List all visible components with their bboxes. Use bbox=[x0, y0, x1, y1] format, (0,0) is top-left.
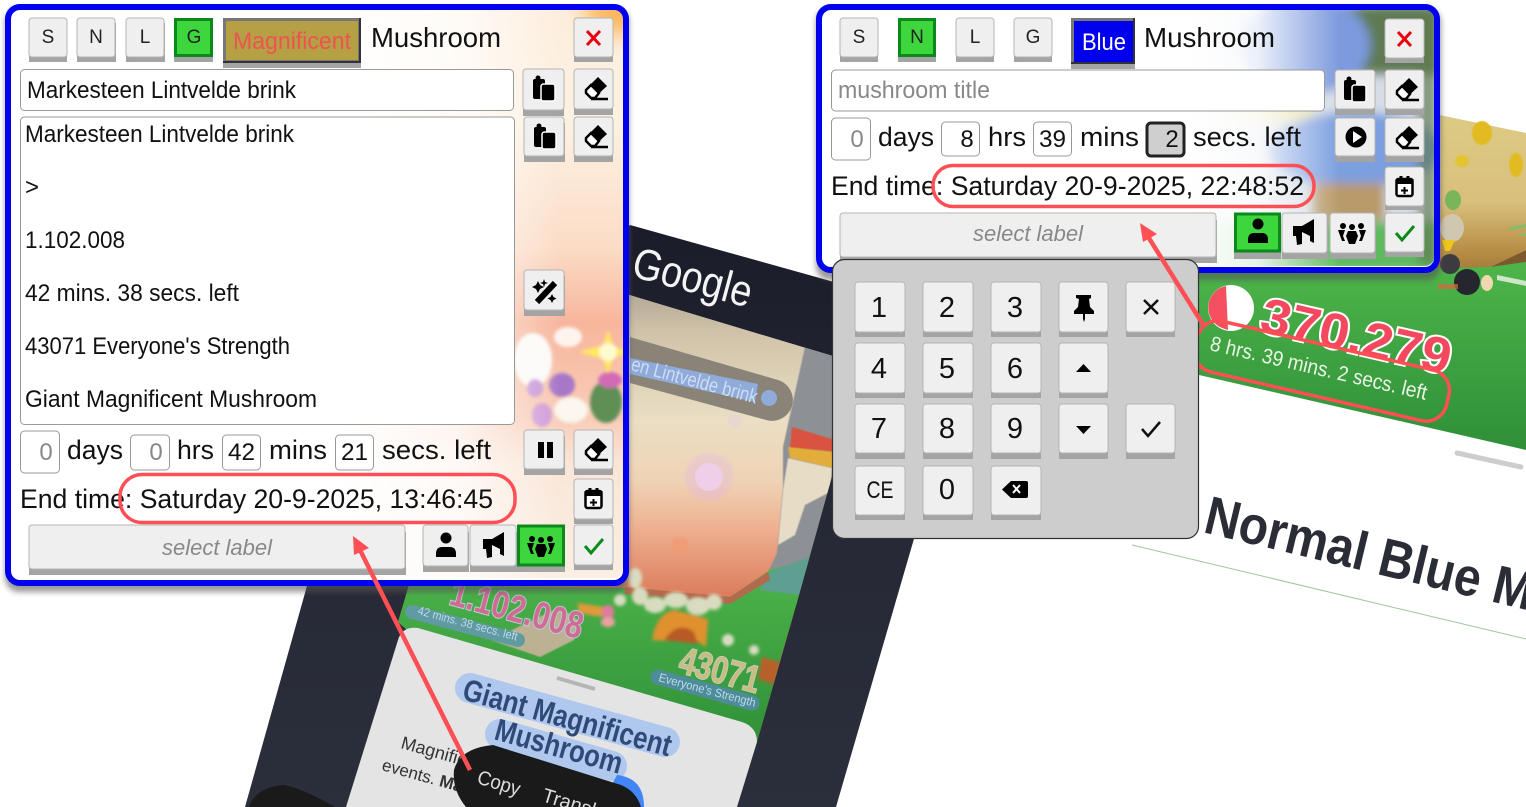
sheet handle bbox=[1457, 453, 1521, 467]
colour button: magnificent: Magnificent bbox=[233, 28, 351, 55]
notes text area: Giant Magnificent Mushroom bbox=[25, 386, 317, 413]
key close bbox=[1126, 282, 1175, 337]
size button L bbox=[956, 18, 994, 62]
play button bbox=[1335, 118, 1375, 162]
timer: seconds: secs. left bbox=[382, 435, 491, 465]
key 4: 4 bbox=[871, 353, 887, 385]
red highlight: remaining time bbox=[1190, 317, 1454, 425]
erase button bbox=[1385, 70, 1424, 115]
copy button bbox=[1335, 70, 1375, 115]
timer: seconds bbox=[336, 435, 491, 470]
group button bbox=[1330, 213, 1376, 259]
key 7: 7 bbox=[871, 413, 887, 445]
erase timer button bbox=[1385, 118, 1424, 162]
close button bbox=[1385, 19, 1424, 63]
key 4 bbox=[855, 343, 905, 398]
google logo: Google bbox=[627, 238, 758, 317]
timer: hours bbox=[942, 122, 1026, 156]
erase button bbox=[574, 69, 613, 115]
person button active bbox=[1234, 214, 1281, 259]
stat: remaining time: 8 hrs. 39 mins. 2 secs. left bbox=[1208, 332, 1429, 405]
confirm button bbox=[1385, 213, 1424, 257]
key confirm bbox=[1126, 404, 1175, 459]
size button G: G bbox=[1026, 27, 1040, 48]
select label button bbox=[29, 525, 406, 575]
key pin bbox=[1059, 282, 1108, 337]
sheet body text: events. Ma bbox=[380, 756, 466, 796]
red highlight: end time bbox=[933, 166, 1314, 206]
timer: seconds focused: secs. left bbox=[1193, 122, 1301, 152]
copy toolbar: Copy bbox=[475, 767, 523, 801]
stat: 370.279: 370.279 bbox=[1256, 287, 1457, 385]
title input bbox=[832, 70, 1324, 111]
timer: minutes: 39 bbox=[1039, 126, 1066, 153]
mushroom game scene bbox=[398, 294, 832, 742]
group button active bbox=[517, 526, 565, 572]
key 9: 9 bbox=[1007, 413, 1023, 445]
pause button bbox=[524, 430, 565, 475]
phone body bbox=[245, 225, 977, 807]
select label button: select label bbox=[162, 535, 273, 560]
key CE bbox=[855, 466, 905, 520]
timer: minutes: 42 bbox=[228, 439, 255, 466]
end time: End time: Saturday 20-9-2025, 22:48:52 bbox=[831, 171, 1304, 201]
timer: seconds focused: 2 bbox=[1165, 126, 1179, 153]
title input bbox=[20, 70, 514, 110]
end time: End time: Saturday 20-9-2025, 13:46:45 bbox=[20, 484, 493, 514]
arrow: right panel to remaining time bbox=[1140, 223, 1204, 326]
colour button: magnificent bbox=[223, 18, 361, 68]
notes text area: 42 mins. 38 secs. left bbox=[25, 280, 239, 307]
sheet body text bbox=[380, 733, 469, 796]
panel background image bbox=[399, 10, 623, 578]
panel background image bbox=[1214, 10, 1434, 266]
size button L bbox=[126, 18, 165, 62]
sheet title: Mushroom bbox=[491, 712, 627, 781]
key 9 bbox=[991, 404, 1041, 459]
timer: hours: hrs bbox=[177, 435, 214, 465]
close button bbox=[574, 18, 613, 62]
size button N bbox=[77, 18, 116, 62]
erase timer button bbox=[574, 430, 613, 475]
key 5 bbox=[923, 343, 973, 398]
timer: minutes bbox=[1034, 122, 1139, 156]
info sheet bbox=[346, 628, 757, 807]
timer: days: days bbox=[878, 122, 934, 152]
key 7 bbox=[855, 404, 905, 459]
system bar pill bbox=[249, 785, 335, 807]
timer: hours bbox=[130, 435, 214, 470]
countdown pie icon bbox=[1208, 285, 1254, 331]
size button N active bbox=[898, 20, 936, 62]
stat: score 1.102.008: 1.102.008 bbox=[446, 572, 588, 648]
notes text area: 1.102.008 bbox=[25, 227, 125, 254]
panel: numeric keypad bbox=[832, 260, 1198, 538]
size button G active: G bbox=[187, 27, 201, 48]
mushroom label: Mushroom bbox=[1144, 22, 1275, 53]
key 6 bbox=[991, 343, 1041, 398]
timer: seconds focused bbox=[1147, 122, 1301, 156]
arrow: left panel to copied text bbox=[353, 536, 470, 770]
stat: everyone's strength: Everyone's Strength bbox=[657, 670, 757, 710]
red highlight: end time bbox=[120, 474, 515, 522]
size button L: L bbox=[970, 27, 980, 48]
timer: days: days bbox=[67, 435, 123, 465]
key 2 bbox=[923, 282, 973, 337]
timer: minutes: mins bbox=[269, 435, 327, 465]
timer: minutes bbox=[222, 435, 327, 470]
size button S bbox=[840, 18, 878, 62]
green meadow band bbox=[1199, 254, 1526, 450]
erase notes button bbox=[574, 117, 613, 162]
stat: remaining time: 42 mins. 38 secs. left bbox=[416, 603, 520, 644]
key 1 bbox=[855, 282, 905, 337]
colour button: blue: Blue bbox=[1082, 29, 1126, 56]
size button S: S bbox=[853, 27, 865, 48]
mushroom label: Mushroom bbox=[371, 22, 501, 53]
confirm button bbox=[574, 525, 613, 570]
magic wand button bbox=[524, 270, 565, 316]
panel: magnificent mushroom editor bbox=[5, 0, 667, 592]
colour button: blue bbox=[1071, 18, 1135, 69]
copy notes button bbox=[524, 117, 565, 162]
timer: hours: 0 bbox=[149, 439, 163, 466]
orange flower huts bbox=[578, 568, 782, 685]
notes text area: 43071 Everyone's Strength bbox=[25, 333, 290, 360]
key 0: 0 bbox=[939, 474, 955, 506]
timer: days: 0 bbox=[39, 439, 53, 466]
notes text area: Markesteen Lintvelde brink bbox=[25, 121, 295, 148]
timer: minutes: mins bbox=[1080, 122, 1139, 152]
timer: hours: 8 bbox=[960, 126, 974, 153]
megaphone button bbox=[470, 525, 517, 572]
key 8: 8 bbox=[939, 413, 955, 445]
key 1: 1 bbox=[871, 292, 887, 324]
panel: blue mushroom editor bbox=[816, 0, 1443, 280]
key 2: 2 bbox=[939, 292, 955, 324]
copy button bbox=[523, 69, 564, 116]
size button G bbox=[1014, 18, 1052, 62]
select label button bbox=[840, 213, 1217, 263]
timer: seconds: 21 bbox=[341, 439, 368, 466]
size button L: L bbox=[140, 27, 150, 48]
size button S: S bbox=[42, 27, 54, 48]
notes text area bbox=[20, 117, 514, 424]
key 3: 3 bbox=[1007, 292, 1023, 324]
title input: Markesteen Lintvelde brink bbox=[27, 77, 297, 104]
pill: location link: en Lintvelde brink bbox=[629, 354, 761, 409]
screenshot: normal blue mushroom bbox=[1132, 113, 1526, 639]
person button bbox=[423, 525, 469, 572]
key 0 bbox=[923, 466, 973, 520]
key 8 bbox=[923, 404, 973, 459]
stat: 43071: 43071 bbox=[675, 640, 765, 702]
key down bbox=[1059, 404, 1108, 459]
key 5: 5 bbox=[939, 353, 955, 385]
phone screenshot: giant magnificent mushroom bbox=[245, 225, 977, 807]
sheet body text: Magnific bbox=[399, 733, 469, 770]
key 3 bbox=[991, 282, 1041, 337]
key 6: 6 bbox=[1007, 353, 1023, 385]
select label button: select label bbox=[973, 221, 1084, 246]
size button N active: N bbox=[910, 27, 924, 48]
megaphone button bbox=[1282, 213, 1328, 259]
title input: mushroom title bbox=[838, 77, 990, 104]
size button N: N bbox=[89, 27, 103, 48]
timer: days bbox=[20, 431, 123, 473]
copy toolbar bbox=[454, 745, 641, 807]
sheet title: Giant Magnificent bbox=[459, 672, 676, 763]
calendar button bbox=[574, 479, 613, 524]
timer: hours: hrs bbox=[988, 122, 1026, 152]
flare star bbox=[580, 330, 623, 374]
size button G active bbox=[174, 20, 213, 62]
timer: days: 0 bbox=[850, 126, 864, 153]
size button S bbox=[29, 18, 67, 62]
timer: days bbox=[832, 118, 934, 160]
key backspace bbox=[991, 466, 1041, 520]
key up bbox=[1059, 343, 1108, 398]
key CE: CE bbox=[866, 477, 894, 504]
notes text area: > bbox=[25, 174, 39, 201]
brown mushroom scene bbox=[1430, 113, 1526, 290]
calendar button bbox=[1385, 167, 1424, 210]
